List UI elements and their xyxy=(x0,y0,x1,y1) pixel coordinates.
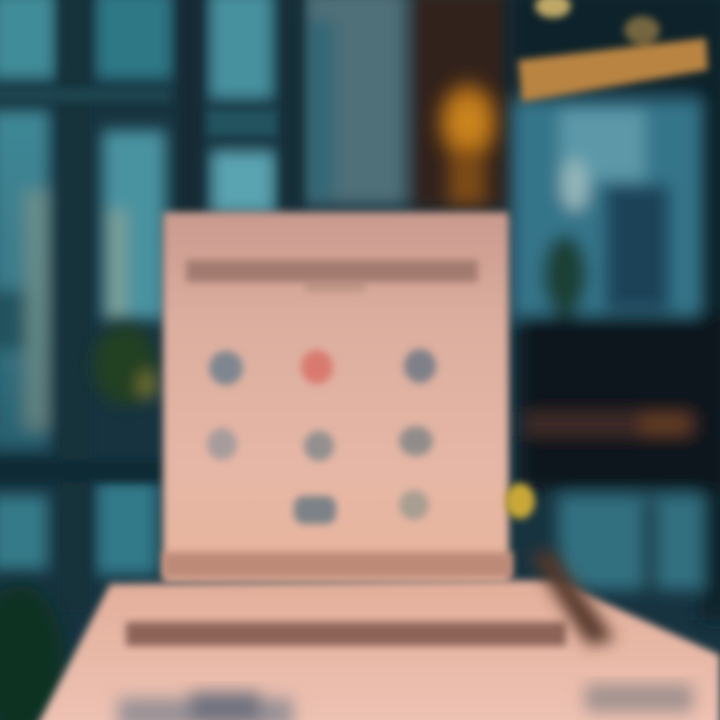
blurred print right xyxy=(585,684,693,712)
board bottom ledge xyxy=(163,552,513,578)
lamp glow xyxy=(430,72,506,205)
blurred print left xyxy=(118,692,293,720)
table edge shadow xyxy=(530,550,615,645)
gold banner sign xyxy=(518,0,708,102)
dark strip xyxy=(126,622,566,646)
window frame bars xyxy=(0,0,302,610)
icon grid xyxy=(207,349,436,524)
panel: table xyxy=(35,550,720,720)
right side window and furniture xyxy=(510,0,720,620)
heading bar xyxy=(186,260,478,291)
yellow accent xyxy=(505,483,535,519)
plant left xyxy=(0,325,158,720)
panel: calendar board xyxy=(163,212,513,582)
